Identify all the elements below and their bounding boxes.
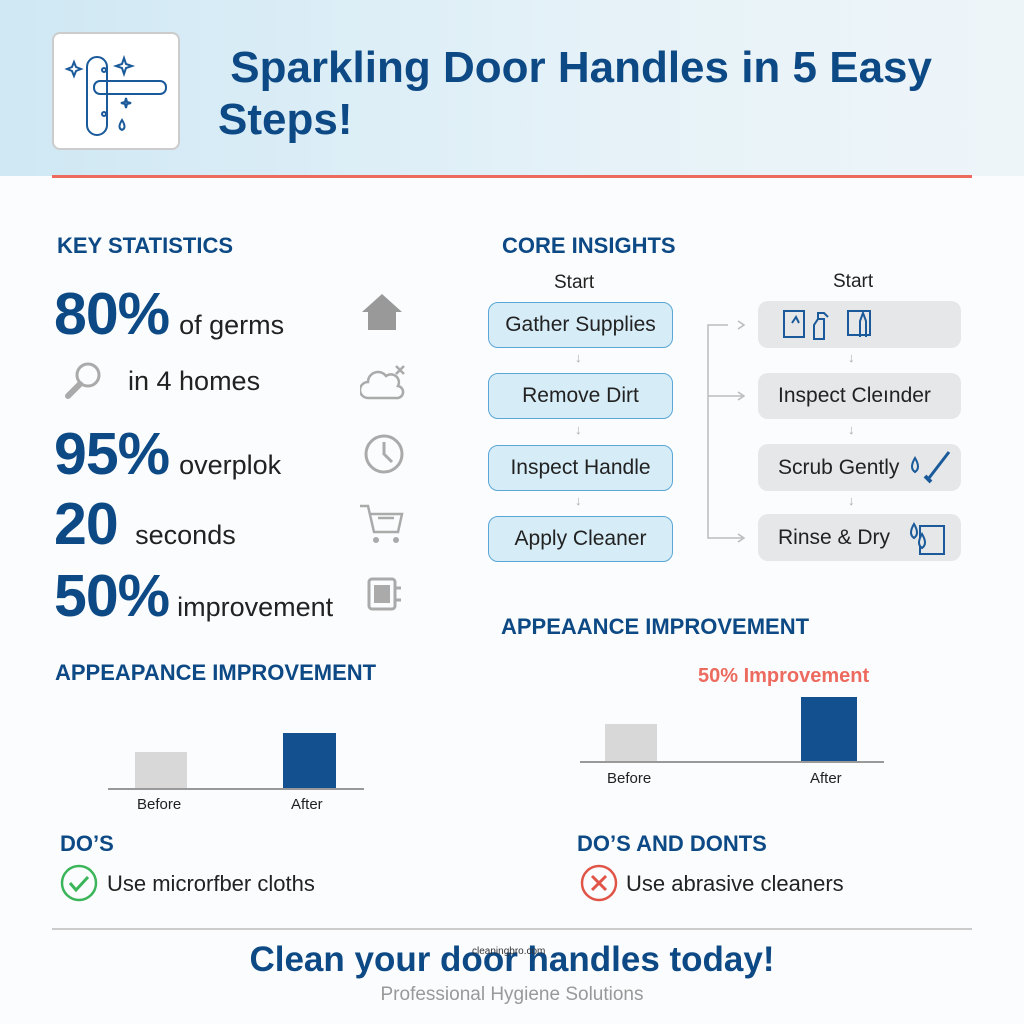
flowchart right — [758, 271, 961, 561]
footer call to action: Clean your door handles today! — [249, 940, 775, 979]
stat 4: 20 seconds — [54, 491, 236, 557]
chart right: Before — [607, 770, 651, 787]
title: Sparkling Door Handles in 5 Easy — [230, 43, 932, 92]
stat 5: 50% improvement — [54, 563, 333, 629]
step: remove dirt — [488, 373, 673, 419]
flowchart right: ↓ — [848, 493, 854, 508]
connector arrows — [707, 320, 746, 542]
step: apply cleaner — [488, 516, 673, 562]
chart right: After — [810, 770, 842, 787]
step: inspect clender — [758, 373, 961, 419]
step: rinse & dry — [758, 514, 961, 561]
stats list — [54, 281, 405, 629]
step: scrub gently: Scrub Gently — [778, 456, 899, 478]
bar: after — [283, 733, 336, 788]
chart right — [580, 697, 884, 787]
flowchart right: ↓ — [848, 422, 854, 437]
flowchart left: ↓ — [575, 493, 582, 508]
icon: cart — [360, 504, 404, 543]
title: Steps! — [218, 95, 352, 144]
bar: before — [135, 752, 187, 788]
footer subtitle: Professional Hygiene Solutions — [380, 984, 644, 1005]
do item: Use microrfber cloths — [107, 871, 315, 896]
bar: before — [605, 724, 657, 761]
step: inspect handle: Inspect Handle — [510, 456, 651, 479]
step: remove dirt: Remove Dirt — [522, 384, 639, 407]
step: scrub gently — [758, 444, 961, 491]
heading: key statistics: KEY STATISTICS — [57, 233, 233, 258]
bar: after — [801, 697, 857, 761]
heading: appearance improvement left: APPEAPANCE IMPROVEMENT — [55, 660, 376, 685]
flowchart right: Start — [833, 271, 873, 292]
callout: 50% improvement: 50% Improvement — [698, 665, 869, 687]
heading: appearance improvement right: APPEAANCE IMPROVEMENT — [501, 614, 809, 639]
header divider line — [52, 175, 972, 178]
chart left — [108, 733, 364, 813]
stat 2: in 4 homes — [128, 366, 260, 396]
chart left: Before — [137, 796, 181, 813]
stat 1: 80% of germs — [54, 281, 284, 347]
step: inspect handle — [488, 445, 673, 491]
stat 3: 95% overplok — [54, 421, 281, 487]
step: supplies icons — [758, 301, 961, 348]
icon: magnifier — [65, 362, 100, 399]
step: rinse & dry: Rinse & Dry — [778, 526, 890, 548]
icon: cloud — [360, 365, 405, 400]
flowchart right: ↓ — [848, 350, 854, 365]
step: inspect clender: Inspect Cleınder — [778, 384, 931, 407]
chart left: After — [291, 796, 323, 813]
heading: do's and donts: DO’S AND DONTS — [577, 831, 767, 856]
flowchart left: ↓ — [575, 422, 582, 437]
flowchart left: Start — [554, 272, 594, 293]
header band — [0, 0, 1024, 176]
watermark: cleaningbro.com — [472, 946, 545, 957]
heading: do's: DO’S — [60, 831, 114, 856]
title — [218, 43, 932, 144]
icon: door handle — [52, 32, 180, 150]
do item — [60, 864, 315, 902]
flowchart left — [488, 272, 673, 562]
heading: core insights: CORE INSIGHTS — [502, 233, 676, 258]
icon: house — [362, 294, 402, 330]
dont item: Use abrasive cleaners — [626, 871, 844, 896]
step: gather supplies: Gather Supplies — [505, 313, 656, 336]
flowchart left: ↓ — [575, 350, 582, 365]
icon: plug box — [368, 578, 401, 610]
icon: clock — [364, 434, 404, 474]
footer divider — [52, 928, 972, 930]
step: gather supplies — [488, 302, 673, 348]
dont item — [580, 864, 844, 902]
step: apply cleaner: Apply Cleaner — [515, 527, 646, 550]
